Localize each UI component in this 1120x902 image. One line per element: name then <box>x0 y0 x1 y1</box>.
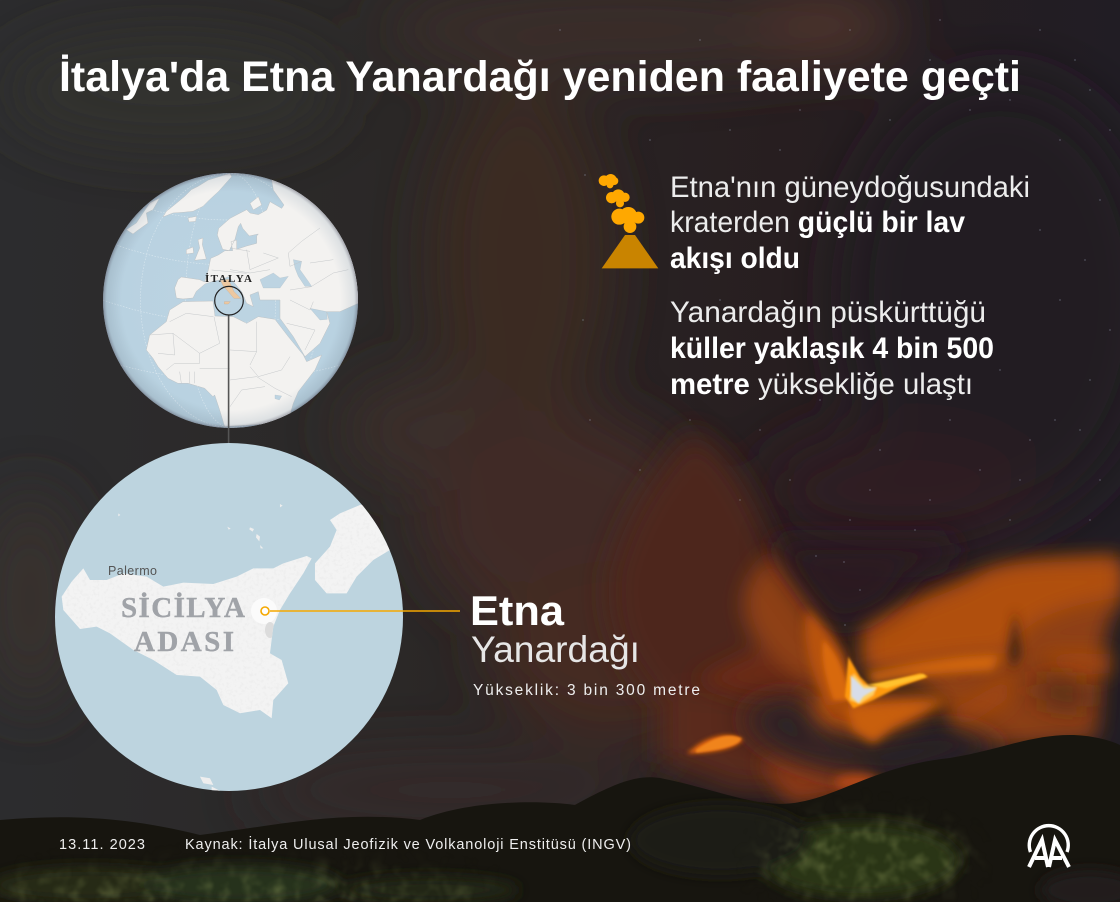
title: İtalya'da Etna Yanardağı yeniden faaliyete geçti <box>59 53 1021 101</box>
small islands <box>118 504 283 793</box>
label: Palermo: Palermo <box>108 564 157 578</box>
Italy highlight <box>221 279 241 304</box>
source: Kaynak: İtalya Ulusal Jeofizik ve Volkanoloji Enstitüsü (INGV) <box>185 835 631 853</box>
label: Sicilya Adası <box>121 591 245 658</box>
Etna label: Yanardağı <box>471 629 640 670</box>
date: 13.11. 2023 <box>59 837 145 853</box>
land masses <box>126 170 370 427</box>
text block: lava flow: Etna'nın güneydoğusundaki <box>670 171 1030 204</box>
text block: ash height: küller yaklaşık 4 bin 500 <box>670 332 994 365</box>
logo: Anadolu Agency <box>1029 826 1069 867</box>
Etna label: Etna <box>470 587 565 634</box>
inland seas <box>260 260 327 400</box>
text block: ash height <box>670 296 994 401</box>
mountains and forest <box>0 735 1120 902</box>
stars <box>560 20 1110 625</box>
graticule <box>103 174 358 428</box>
Etna pointer <box>261 607 460 615</box>
globe locator map <box>103 170 370 428</box>
text block: ash height: metre yüksekliğe ulaştı <box>670 368 973 401</box>
label: Sicilya Adası: SİCİLYA <box>121 591 245 624</box>
text block: lava flow: akışı oldu <box>670 242 800 275</box>
text block: lava flow <box>670 171 1030 275</box>
Sicily map <box>55 443 403 793</box>
Etna label: Yükseklik: 3 bin 300 metre <box>473 682 700 699</box>
text block: lava flow: kraterden güçlü bir lav <box>670 206 966 239</box>
text block: ash height: Yanardağın püskürttüğü <box>670 296 986 329</box>
label: Sicilya Adası: ADASI <box>134 626 234 658</box>
label: İtalya: İTALYA <box>205 273 252 285</box>
connector line from globe to Sicily map <box>228 315 230 444</box>
Etna label <box>470 587 700 699</box>
borders <box>150 228 348 407</box>
icon: volcano with ash clouds <box>599 174 658 268</box>
locator ring on Italy <box>215 286 243 315</box>
